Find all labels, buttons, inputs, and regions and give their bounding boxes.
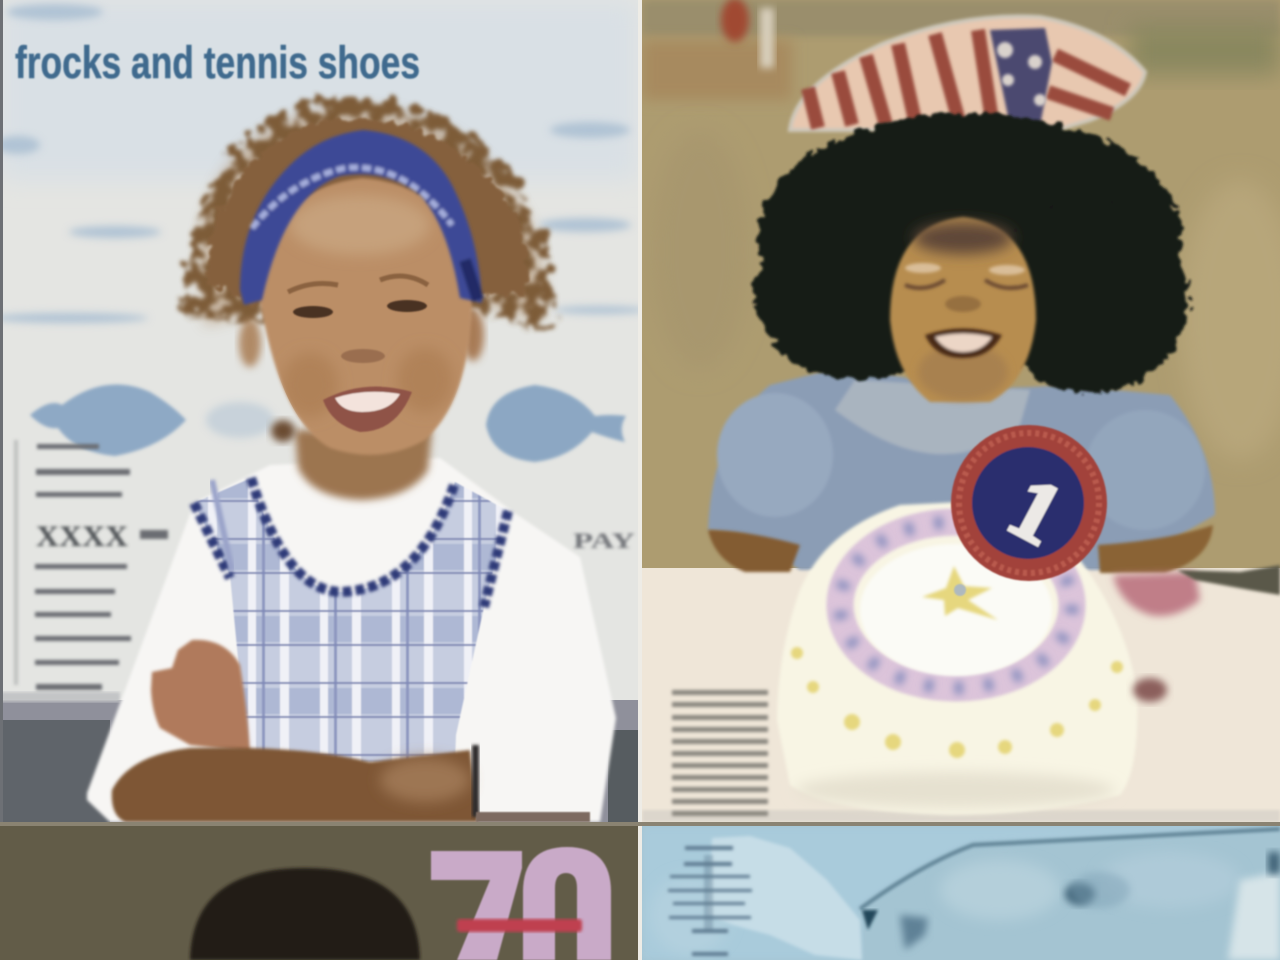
face xyxy=(239,178,484,455)
panel: girl with headband xyxy=(0,0,646,822)
hair xyxy=(182,98,555,335)
backdrop xyxy=(642,826,1280,960)
title: frocks and tennis shoes xyxy=(15,37,420,88)
panel: anniversary cover xyxy=(0,826,638,960)
cushion folds xyxy=(642,826,1280,960)
blurred article text xyxy=(672,690,768,816)
plaid jumper xyxy=(194,478,508,762)
blurred article text xyxy=(14,440,635,690)
panel: blue tufted cushions xyxy=(642,826,1280,960)
facial features xyxy=(905,263,1028,358)
photo backdrop: fish wallpaper xyxy=(0,0,646,822)
arms xyxy=(708,525,1213,573)
blurred article text: XXXX xyxy=(36,520,128,553)
icon: rosette with number one xyxy=(951,425,1107,581)
facial features xyxy=(288,276,428,432)
blurred caption xyxy=(668,846,752,956)
photo backdrop: field xyxy=(642,0,1280,822)
portrait silhouette xyxy=(190,868,420,960)
folded pillow xyxy=(708,836,862,960)
afro wig xyxy=(754,113,1188,393)
blurred article text: PAY xyxy=(573,528,635,553)
icon: large fish left xyxy=(30,384,186,456)
dress xyxy=(708,365,1215,570)
red caption across number xyxy=(457,919,582,932)
face xyxy=(890,217,1036,402)
panel: child in wig with birthday cake xyxy=(642,0,1280,822)
striped hat xyxy=(790,16,1145,135)
icon: large fish right xyxy=(486,385,626,462)
birthday cake xyxy=(777,500,1137,815)
icon: rosette with number one: 1 xyxy=(993,459,1078,565)
headband xyxy=(240,130,482,305)
neck and white shirt xyxy=(87,430,616,822)
number seventy xyxy=(431,847,611,960)
backdrop xyxy=(0,826,638,960)
flowers on table xyxy=(1113,565,1280,702)
crossed arms xyxy=(112,640,590,822)
